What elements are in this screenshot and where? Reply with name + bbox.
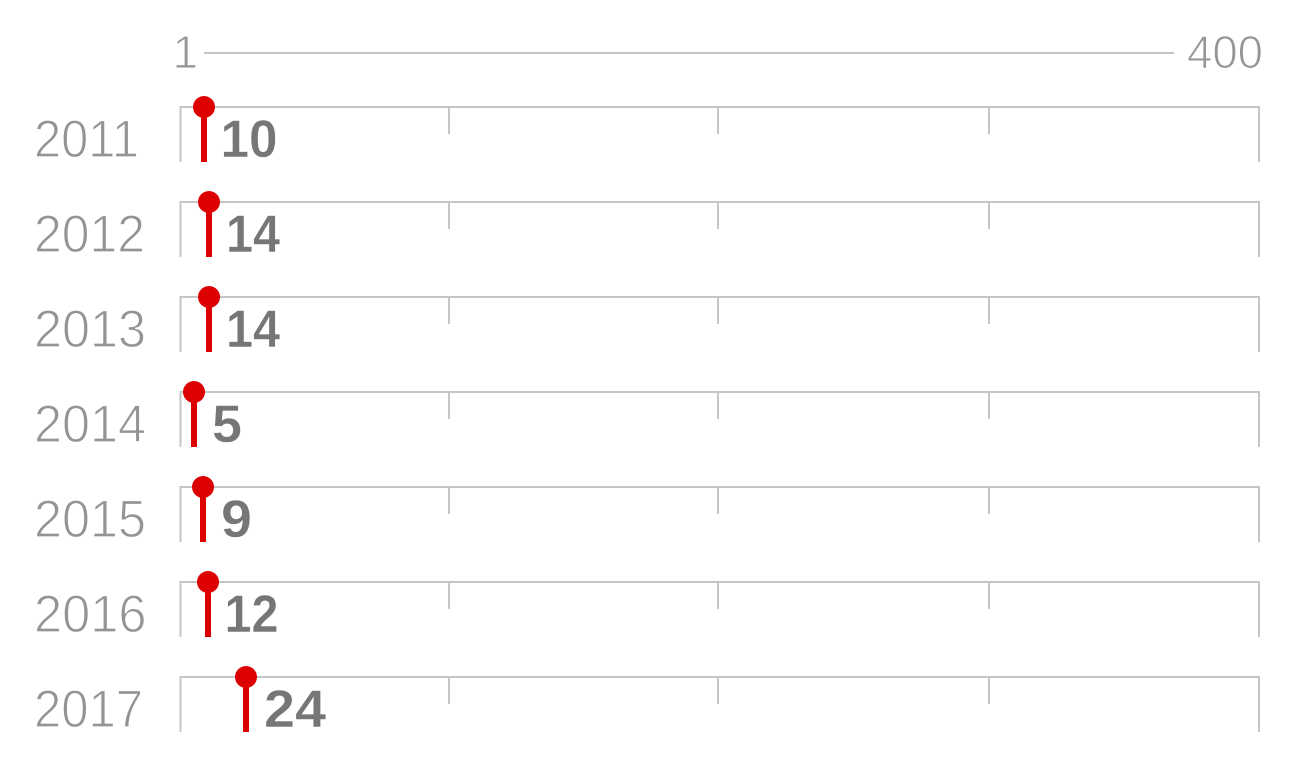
gauge track 2014 [180, 392, 1259, 447]
row: 2011 [34, 96, 1259, 169]
axis maximum label: 400 [1187, 26, 1263, 78]
gauge track 2012 [180, 202, 1259, 257]
year label 2017: 2017 [34, 680, 143, 739]
value 2014: 5 [212, 395, 242, 454]
value 2016: 12 [224, 585, 278, 644]
axis scale [172, 26, 1263, 78]
gauge track 2013 [180, 297, 1259, 352]
year label 2011: 2011 [34, 110, 139, 169]
value 2017: 24 [264, 680, 327, 739]
marker 2013 [198, 286, 220, 352]
value 2012: 14 [226, 205, 280, 264]
year label 2014: 2014 [34, 395, 146, 454]
row: 2012 [34, 191, 1259, 264]
row: 2014 [34, 381, 1259, 454]
marker 2012 [198, 191, 220, 257]
marker 2016 [197, 571, 219, 637]
value 2015: 9 [221, 490, 252, 549]
row: 2017 [34, 666, 1259, 739]
marker 2015 [192, 476, 214, 542]
value 2011: 10 [220, 110, 278, 169]
year label 2015: 2015 [34, 490, 146, 549]
row: 2015 [34, 476, 1259, 549]
axis minimum label: 1 [172, 26, 198, 78]
marker 2014 [183, 381, 205, 447]
axis line [204, 52, 1174, 54]
gauge track 2016 [180, 582, 1259, 637]
row: 2016 [34, 571, 1259, 644]
year label 2012: 2012 [34, 205, 145, 264]
year label 2013: 2013 [34, 300, 146, 359]
gauge track 2017 [180, 677, 1259, 732]
gauge track 2011 [180, 107, 1259, 162]
gauge track 2015 [180, 487, 1259, 542]
marker 2011 [193, 96, 215, 162]
marker 2017 [235, 666, 257, 732]
value 2013: 14 [226, 300, 280, 359]
row: 2013 [34, 286, 1259, 359]
year label 2016: 2016 [34, 585, 146, 644]
